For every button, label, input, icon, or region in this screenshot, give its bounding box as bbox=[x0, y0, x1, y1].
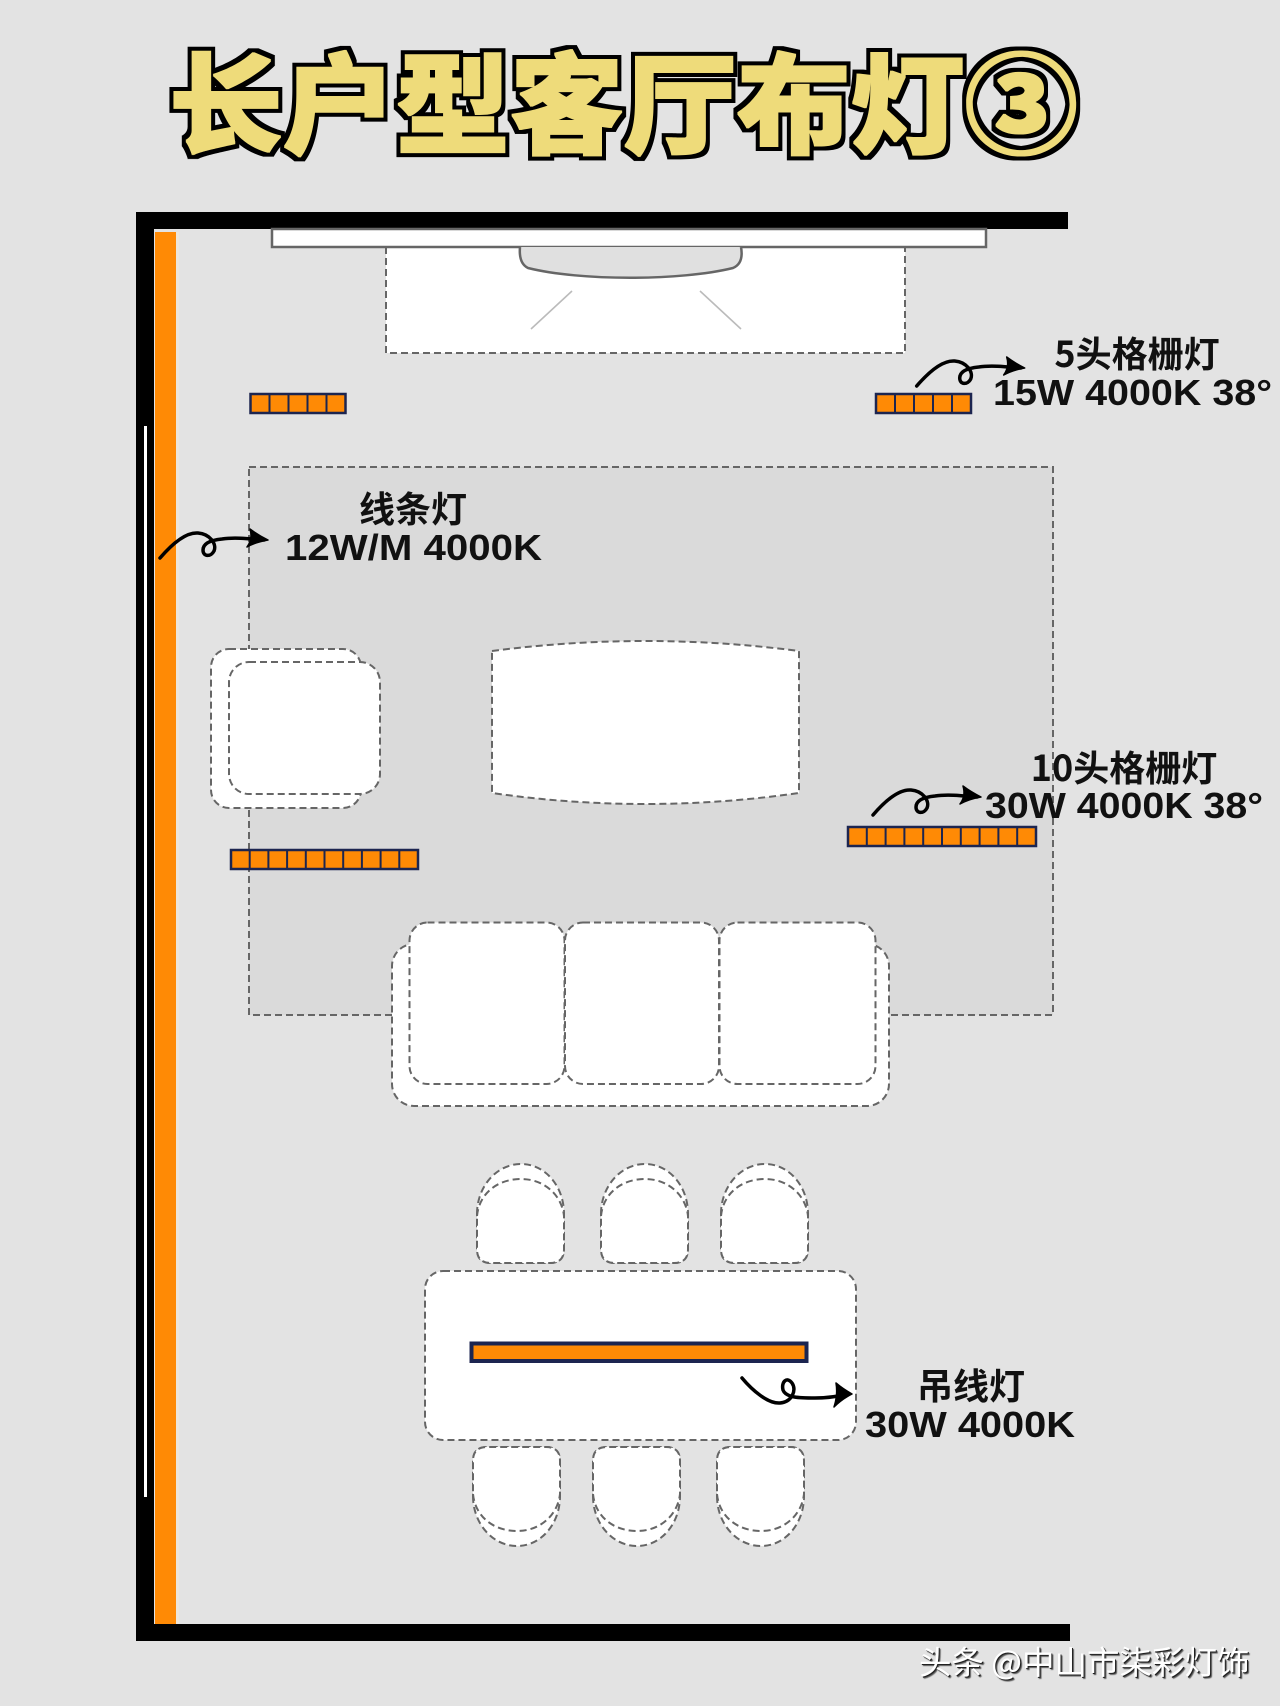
10-head grille light right bbox=[848, 827, 1036, 846]
label: 10-head grille light: 10头格栅灯 bbox=[1031, 740, 1217, 792]
armchair bbox=[211, 649, 380, 808]
linear light strip bbox=[155, 232, 179, 1624]
dining chairs top bbox=[477, 1164, 808, 1263]
label: pendant light: 吊线灯 bbox=[917, 1358, 1025, 1410]
arrow: pendant label bbox=[742, 1378, 852, 1407]
label: 5-head grille light: 15W 4000K 38° bbox=[993, 372, 1272, 413]
label: linear light: 线条灯 bbox=[359, 481, 467, 533]
tv bbox=[520, 247, 742, 329]
dining chairs bottom bbox=[473, 1447, 804, 1546]
tv cabinet bbox=[272, 229, 986, 247]
label: pendant light bbox=[865, 1358, 1075, 1445]
arrow: 5-head label bbox=[917, 357, 1025, 386]
label: 5-head grille light: 5头格栅灯 bbox=[1054, 326, 1220, 378]
title: 长户型客厅布灯③ bbox=[169, 20, 1078, 177]
walls bbox=[136, 212, 1070, 1641]
10-head grille light left bbox=[231, 850, 418, 869]
label: linear light: 12W/M 4000K bbox=[285, 527, 542, 568]
label: 10-head grille light: 30W 4000K 38° bbox=[985, 785, 1263, 826]
label: pendant light: 30W 4000K bbox=[865, 1404, 1075, 1445]
watermark: 头条 @中山市柒彩灯饰 bbox=[919, 1637, 1250, 1684]
pendant linear light bbox=[472, 1344, 806, 1361]
5-head grille light left bbox=[250, 394, 346, 413]
arrow: linear light label bbox=[160, 529, 268, 558]
label: 10-head grille light bbox=[985, 740, 1263, 826]
panel: carpet bbox=[249, 467, 1053, 1015]
label: 5-head grille light bbox=[993, 326, 1272, 413]
dining table bbox=[425, 1271, 856, 1440]
sofa bbox=[392, 922, 889, 1106]
tv rug bbox=[386, 247, 905, 353]
coffee table bbox=[492, 641, 799, 804]
label: linear light bbox=[285, 481, 542, 568]
arrow: 10-head label bbox=[873, 786, 981, 815]
5-head grille light right bbox=[876, 394, 971, 413]
